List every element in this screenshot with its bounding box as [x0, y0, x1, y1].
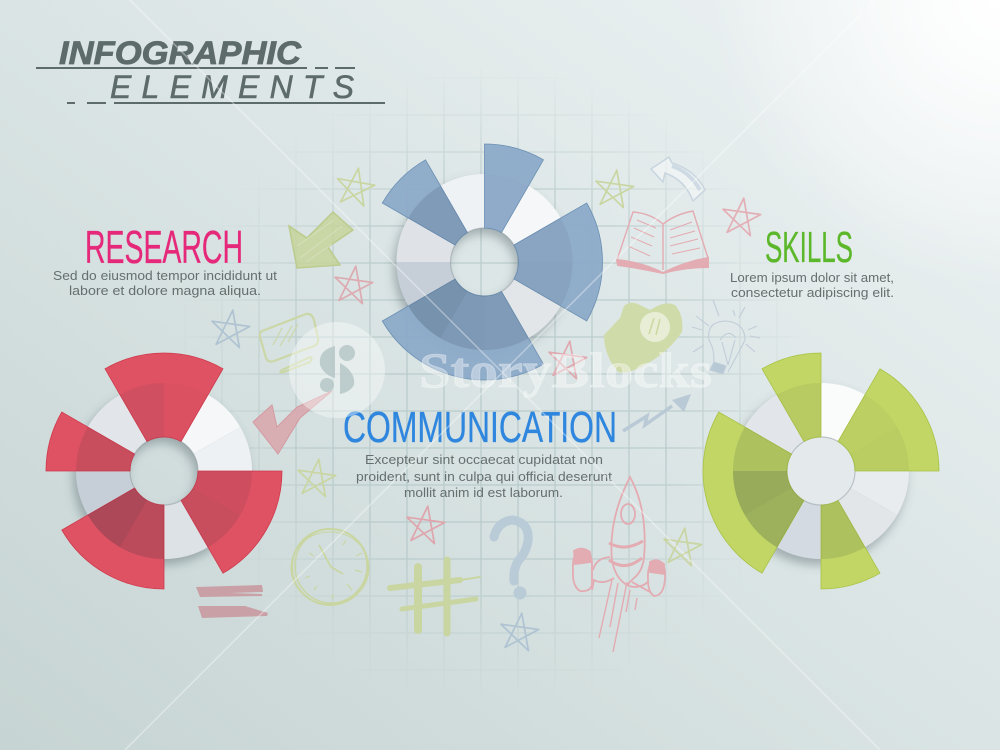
body text: communication: proident, sunt in culpa qui officia deserunt [356, 470, 613, 484]
watermark text: StoryBlocks [419, 342, 712, 398]
heading: communication: COMMUNICATION [343, 403, 617, 452]
text block: skills [730, 223, 894, 300]
heading: research: RESEARCH [85, 221, 243, 273]
icon: pink star 1 [720, 196, 763, 237]
watermark diagonals [125, 0, 880, 750]
body text: skills: Lorem ipsum dolor sit amet, [730, 271, 894, 285]
title word: infographic: INFOGRAPHIC [59, 35, 302, 71]
hole edge [787, 437, 855, 505]
icon: pink star 4 [404, 504, 447, 545]
body text: research: labore et dolore magna aliqua. [69, 284, 261, 298]
icon: rocket [573, 477, 665, 652]
body text: communication: mollit anim id est laborum. [404, 486, 563, 500]
blue sectors [382, 144, 638, 423]
red sector shading [76, 373, 252, 559]
title rules [36, 67, 385, 104]
icon: curved arrow [651, 157, 705, 201]
icon: green star 3 [295, 457, 338, 498]
icon: green star 1 [333, 165, 377, 207]
hole edge [130, 437, 198, 505]
icon: blue star 2 [498, 611, 541, 652]
blue sector shading [402, 174, 583, 360]
body text: skills: consectetur adipiscing elit. [731, 286, 894, 300]
icon: pink star 2 [332, 264, 375, 305]
green sectors [660, 339, 968, 603]
icon: clock [291, 529, 369, 605]
green sector shading [723, 373, 919, 569]
red sectors [46, 318, 282, 589]
body text: communication: Excepteur sint occaecat cupidatat non [365, 453, 603, 467]
icon: green star 4 [661, 526, 704, 567]
disc [723, 373, 919, 569]
heading: skills: SKILLS [765, 223, 853, 272]
icon: open book [617, 211, 708, 273]
icon: sketched green arrow [289, 212, 353, 268]
icon: green star 2 [593, 168, 636, 209]
icon: camera [604, 303, 682, 373]
icon: pink star 3 [546, 339, 589, 380]
wheel: blue [382, 144, 638, 423]
watermark [125, 0, 880, 750]
title word: elements: ELEMENTS [110, 69, 354, 105]
icon: growth arrow [623, 394, 691, 431]
body text: research [53, 269, 278, 298]
wheel: red [46, 318, 282, 589]
icon: hash sign [390, 560, 480, 633]
disc [66, 373, 262, 569]
body text: skills [730, 271, 894, 300]
hole edge [450, 228, 518, 296]
icon: blue star 1 [209, 308, 252, 349]
icon: monitor [260, 314, 318, 372]
disc [386, 164, 583, 360]
icon: check mark [253, 391, 332, 454]
title [36, 35, 385, 105]
text block: communication [343, 403, 617, 500]
body text: communication [356, 453, 613, 500]
pink scribble bars [196, 585, 268, 618]
text block: research [53, 221, 278, 298]
watermark logo [289, 322, 385, 418]
body text: research: Sed do eiusmod tempor incididunt ut [53, 269, 278, 283]
icon: question mark [494, 520, 528, 600]
doodles [196, 157, 763, 652]
icon: light bulb [692, 300, 760, 374]
wheel: green [660, 339, 968, 603]
